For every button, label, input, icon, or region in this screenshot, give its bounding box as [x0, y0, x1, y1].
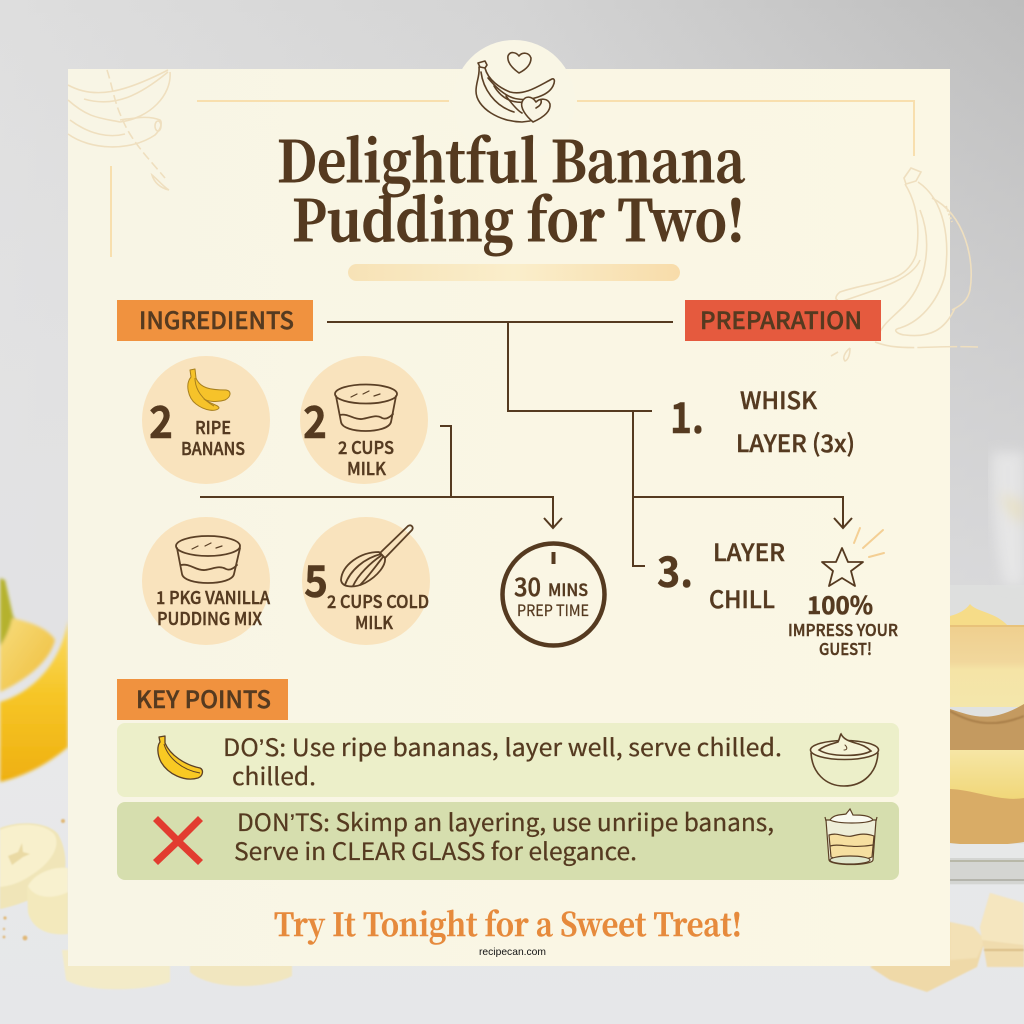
ingredient: vanilla pudding mix — [142, 517, 270, 645]
blurred banana bunch on the left — [0, 578, 68, 782]
heading: preparation: PREPARATION — [700, 301, 862, 336]
decoration: top-left banana line art — [68, 70, 170, 190]
pudding glass on the right — [950, 585, 1024, 885]
timer: 30 mins prep time: MINS — [548, 576, 588, 601]
step 3: layer and chill — [657, 533, 785, 615]
step 1: whisk and layer: 1. — [670, 385, 704, 446]
ingredient: 2 cups milk: MILK — [347, 456, 386, 481]
heading: key points: KEY POINTS — [136, 680, 271, 715]
wafer cookies on the right — [870, 893, 1024, 992]
ingredient: ripe bananas: 2 — [149, 387, 173, 451]
step 3: layer and chill: LAYER — [713, 533, 785, 568]
panel: don'ts: DON’TS: Skimp an layering, use unriipe banans, — [237, 803, 774, 838]
icon: top emblem bananas and hearts — [476, 53, 554, 122]
icon: banana — [158, 736, 202, 779]
ingredient: cold milk whisk: 5 — [304, 546, 328, 610]
icon: pudding glass — [825, 809, 877, 864]
callout: 100% impress your guest: 100% — [807, 586, 873, 621]
ingredient: cold milk whisk — [302, 517, 430, 645]
heading: ingredients: INGREDIENTS — [139, 301, 294, 336]
timer: 30 mins prep time: 30 — [514, 568, 541, 604]
title: Pudding for Two! — [292, 176, 745, 258]
decoration: right banana line art — [831, 168, 978, 361]
panel: do's — [117, 723, 899, 797]
source credit: recipecan.com — [479, 946, 546, 958]
icon: star with sparks — [822, 528, 884, 586]
icon: pudding cup — [335, 384, 397, 431]
flow connector lines — [200, 322, 852, 566]
panel: do's: DO’S: Use ripe bananas, layer well, serve chilled. — [223, 728, 782, 763]
faint glass in the background — [992, 452, 1024, 585]
title: Delightful Banana — [277, 117, 746, 199]
callout: 100% impress your guest: GUEST! — [819, 636, 872, 660]
step 1: whisk and layer: LAYER (3x) — [736, 424, 855, 459]
heading: ingredients — [117, 300, 313, 341]
ingredient: ripe bananas — [142, 356, 270, 484]
panel: don'ts: Serve in CLEAR GLASS for elegance. — [234, 832, 637, 867]
ingredient: cold milk whisk: 2 CUPS COLD — [327, 589, 429, 614]
step 3: layer and chill: CHILL — [709, 580, 775, 615]
panel: do's: chilled. — [232, 757, 316, 792]
icon: red cross — [153, 816, 203, 865]
icon: cream bowl — [810, 734, 878, 786]
title — [277, 117, 746, 258]
ingredient: 2 cups milk: 2 — [303, 387, 327, 451]
ingredient: 2 cups milk — [300, 356, 428, 484]
ingredient: ripe bananas: BANANS — [181, 436, 245, 461]
timer: 30 mins prep time: PREP TIME — [517, 599, 589, 621]
icon: yellow bananas — [188, 369, 230, 410]
heading: key points — [117, 679, 288, 720]
ingredient: 2 cups milk: 2 CUPS — [338, 435, 394, 460]
title underline bar — [348, 264, 680, 281]
banana slices on the table — [0, 823, 292, 989]
call to action: Try It Tonight for a Sweet Treat! — [274, 900, 742, 946]
step 3: layer and chill: 3. — [657, 539, 693, 600]
timer: 30 mins prep time — [502, 544, 604, 646]
callout: 100% impress your guest: IMPRESS YOUR — [788, 617, 898, 641]
step 1: whisk and layer — [670, 381, 855, 459]
ingredient: cold milk whisk: MILK — [355, 610, 393, 635]
icon: whisk — [341, 525, 413, 586]
ingredient: vanilla pudding mix: PUDDING MIX — [157, 606, 263, 631]
ingredient: vanilla pudding mix: 1 PKG VANILLA — [156, 585, 270, 610]
decoration: frame lines — [111, 101, 914, 257]
callout: 100% impress your guest — [788, 528, 898, 660]
main cream panel — [68, 40, 950, 966]
icon: pudding bowl — [176, 536, 240, 583]
step 1: whisk and layer: WHISK — [740, 381, 817, 416]
ingredient: ripe bananas: RIPE — [195, 415, 231, 440]
crumbs on the table — [3, 819, 65, 940]
panel: don'ts — [117, 802, 899, 880]
